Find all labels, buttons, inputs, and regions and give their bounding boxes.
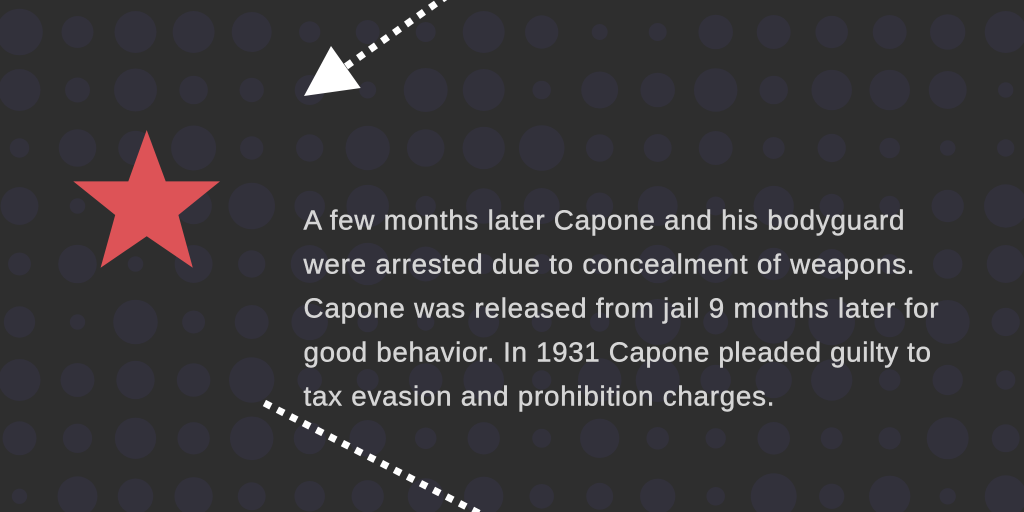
icon: red star: [73, 130, 220, 268]
body text block: were arrested due to concealment of weapons.: [302, 248, 914, 280]
body text block: Capone was released from jail 9 months later for: [304, 292, 938, 324]
body text block: good behavior. In 1931 Capone pleaded guilty to: [304, 336, 931, 368]
arrow: dashed line with head pointing to lower left: [304, 0, 460, 96]
body text block: [302, 204, 938, 412]
dashed connector line at bottom: [264, 403, 489, 512]
body text block: tax evasion and prohibition charges.: [304, 380, 774, 412]
body text block: A few months later Capone and his bodyguard: [304, 204, 904, 236]
